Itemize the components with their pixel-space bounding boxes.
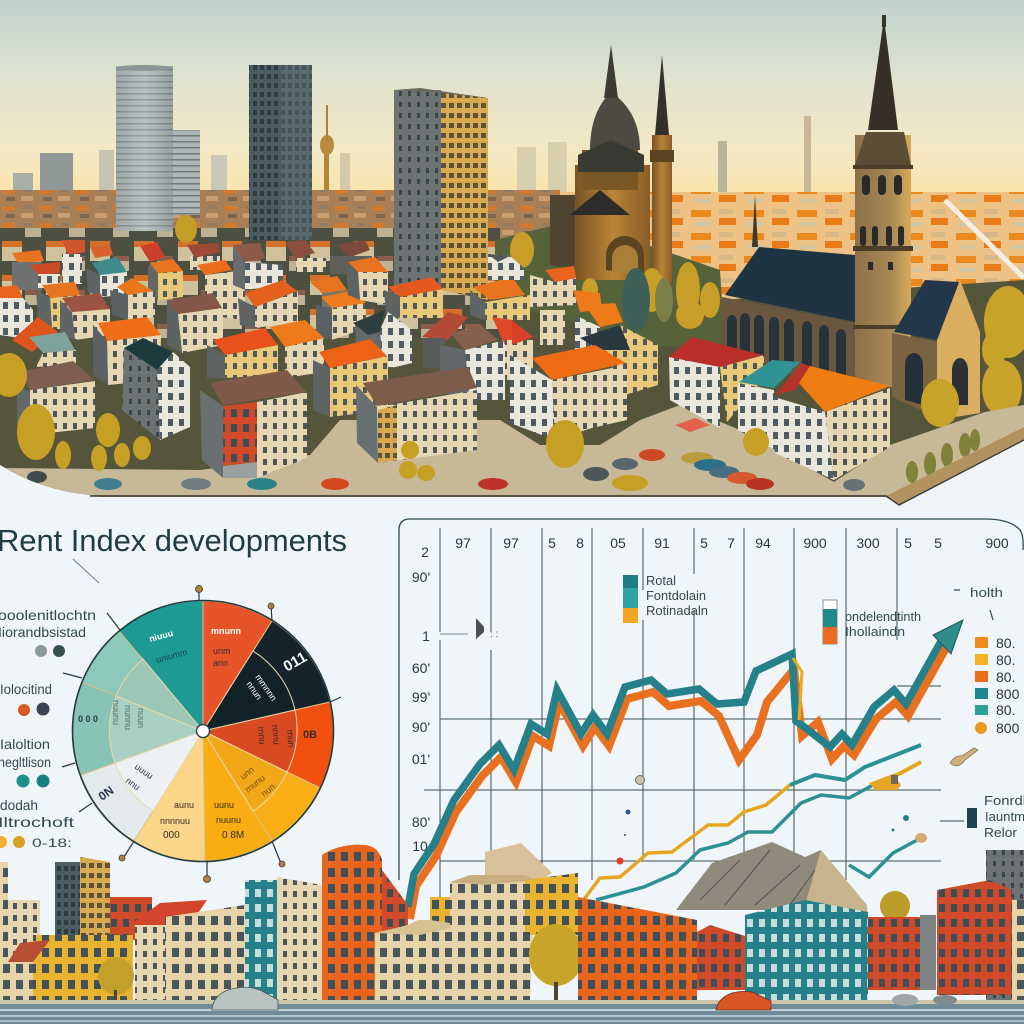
front row of houses (17, 337, 890, 480)
note block: Fonrdl (984, 793, 1024, 808)
right legend: 80. (996, 702, 1015, 718)
ground between houses (0, 280, 1024, 495)
wedge labels: uuuu (133, 761, 155, 781)
decorative pointer (73, 559, 99, 583)
pie wedges inner ring (109, 651, 297, 811)
legend entry 2: Iolocitind (0, 681, 52, 697)
left axis labels: 01' (412, 751, 430, 767)
upper secondary lines (582, 745, 921, 902)
panel: bottom cityscape (0, 842, 1024, 1024)
arrow head (933, 620, 963, 654)
wedge labels: mnu (256, 726, 267, 745)
scene base edge (90, 427, 1024, 505)
note block (940, 793, 1024, 840)
legend entry 1: ooolenitlochtn (0, 607, 96, 623)
back rows of houses (0, 240, 658, 400)
woods behind church (495, 220, 725, 350)
wedge labels: mmnnn (253, 672, 279, 703)
pie legend (0, 607, 96, 850)
wedge labels: nnnu (270, 724, 282, 745)
pavement line (0, 1000, 1024, 1004)
legend A: Fontdolain (646, 588, 706, 603)
top axis labels: 900 (803, 535, 827, 551)
wedge labels (78, 626, 317, 841)
tree (529, 924, 583, 1000)
wedge labels: nuunu (216, 815, 241, 825)
title: Rent Index developments (0, 523, 347, 558)
right buildings (868, 850, 1024, 1000)
wedge labels: mnunn (211, 626, 241, 636)
wedge labels: unm (213, 646, 231, 656)
wedge labels: 011 (280, 649, 310, 675)
trees at right edge (921, 286, 1024, 427)
trees beside church (510, 232, 720, 332)
wedge labels: ann (213, 658, 228, 668)
legend entry 4: dodah (0, 797, 38, 813)
left axis labels: 99' (412, 689, 430, 705)
line chart (399, 519, 1024, 919)
pipe icon (950, 748, 978, 766)
right legend: 80. (996, 635, 1015, 651)
parked cars (27, 449, 865, 491)
wedge labels: mun (285, 729, 296, 748)
small grey tower (173, 130, 200, 215)
left axis labels: 60' (412, 660, 430, 676)
top axis labels: 5 (548, 535, 556, 551)
left axis labels (412, 544, 430, 854)
legend B: Ihollaindn (845, 624, 905, 639)
top axis labels: 5 (700, 535, 708, 551)
pie callout pins (119, 586, 285, 882)
right legend: 80. (996, 652, 1015, 668)
legend entry 4: 0-18: (32, 836, 72, 850)
dark glass tower (249, 65, 312, 240)
panel: illustrated city skyline (0, 0, 1024, 500)
wedge labels: 000 (163, 830, 180, 841)
annotation dots (616, 776, 909, 864)
top axis labels: 91 (654, 535, 670, 551)
top axis labels: 5 (934, 535, 942, 551)
right legend: 800 (996, 720, 1020, 736)
top axis labels: 8 (576, 535, 584, 551)
top axis labels: 97 (455, 535, 471, 551)
wedge labels: nnu (124, 775, 142, 792)
orange rounded tower (322, 845, 408, 1000)
cylindrical tower (116, 65, 173, 231)
top axis labels: 300 (856, 535, 880, 551)
dense house texture (0, 228, 500, 338)
distant towers (13, 105, 811, 192)
church with dome (495, 45, 725, 350)
left axis labels: 80' (412, 814, 430, 830)
top axis labels: 94 (755, 535, 771, 551)
distant city left (0, 190, 560, 239)
left buildings (0, 857, 322, 1002)
legend entry 4 (0, 797, 74, 850)
small marker near axis (440, 618, 498, 640)
top axis labels: 5 (904, 535, 912, 551)
legend B (823, 600, 921, 644)
line end marker (915, 833, 927, 843)
wedge labels: aunu (174, 800, 194, 810)
right legend: 800 (996, 686, 1020, 702)
central buildings (375, 843, 745, 1000)
wedge labels: 0 0 0 (78, 714, 98, 724)
note block: Iauntm (985, 809, 1024, 824)
top axis labels: 900 (985, 535, 1009, 551)
high note (954, 585, 1003, 620)
wedge labels: nunnu (123, 705, 133, 730)
wedge labels: 0N (96, 783, 116, 803)
pie chart (62, 585, 341, 882)
left axis labels: 90' (412, 719, 430, 735)
pencil marker (869, 774, 901, 790)
awning (675, 418, 710, 432)
wedge labels: 0 8M (222, 830, 244, 841)
right legend: 80. (996, 669, 1015, 685)
diagonal road (945, 200, 1024, 278)
street surface (0, 405, 1024, 500)
legend entry 1 (0, 607, 96, 657)
wedge labels: nnun (244, 679, 264, 702)
left axis labels: 10 (412, 838, 428, 854)
legend entry 3: Ialoltion (0, 736, 50, 752)
top axis labels: 7 (727, 535, 735, 551)
cars (212, 987, 957, 1010)
slate roof building (676, 842, 868, 1000)
pie centre (196, 724, 210, 738)
wedge labels: nuunu (111, 700, 121, 725)
top axis labels: 97 (503, 535, 519, 551)
apartment block (394, 88, 488, 300)
large church (722, 15, 980, 420)
legend entry 1: Iiorandbsistad (0, 624, 86, 640)
pie wedges outer (73, 601, 333, 861)
street band (0, 1004, 1024, 1024)
left axis labels: 90' (412, 569, 430, 585)
trees near towers (175, 215, 197, 243)
top axis labels (455, 535, 1009, 551)
legend B: ondelendtinth (845, 609, 921, 624)
wedge labels: nnnnuu (160, 816, 190, 826)
pie outline (72, 600, 334, 862)
wedge labels: 0B (303, 729, 317, 741)
main rising line (408, 636, 946, 919)
wedge labels: nuun (136, 708, 146, 728)
legend A (623, 573, 708, 623)
sky (0, 0, 1024, 200)
wedge labels: uunu (214, 800, 234, 810)
high note: holth (970, 585, 1003, 600)
grid lines (424, 528, 941, 910)
wedge labels: niuuu (148, 628, 174, 644)
left axis labels: 2 (421, 544, 429, 560)
left axis labels: 1 (422, 628, 430, 644)
wedge labels: nun (259, 781, 277, 799)
legend A: Rotal (646, 573, 676, 588)
legend entry 3 (0, 736, 51, 788)
pie callout stubs (62, 585, 341, 880)
small marker near axis: : : (490, 629, 498, 640)
wedge labels: munu (243, 773, 267, 795)
chart frame (399, 519, 1023, 880)
right legend (975, 635, 1020, 736)
yellow trees and shrubs (0, 353, 980, 491)
wedge labels: uniumm (155, 647, 188, 665)
distant city right (560, 192, 1024, 308)
top axis labels: 05 (610, 535, 626, 551)
legend entry 2 (0, 681, 52, 716)
wedge labels: unn (238, 764, 256, 782)
legend A: Rotinadaln (646, 603, 708, 618)
tree (98, 957, 134, 1002)
note block: Relor (984, 825, 1018, 840)
